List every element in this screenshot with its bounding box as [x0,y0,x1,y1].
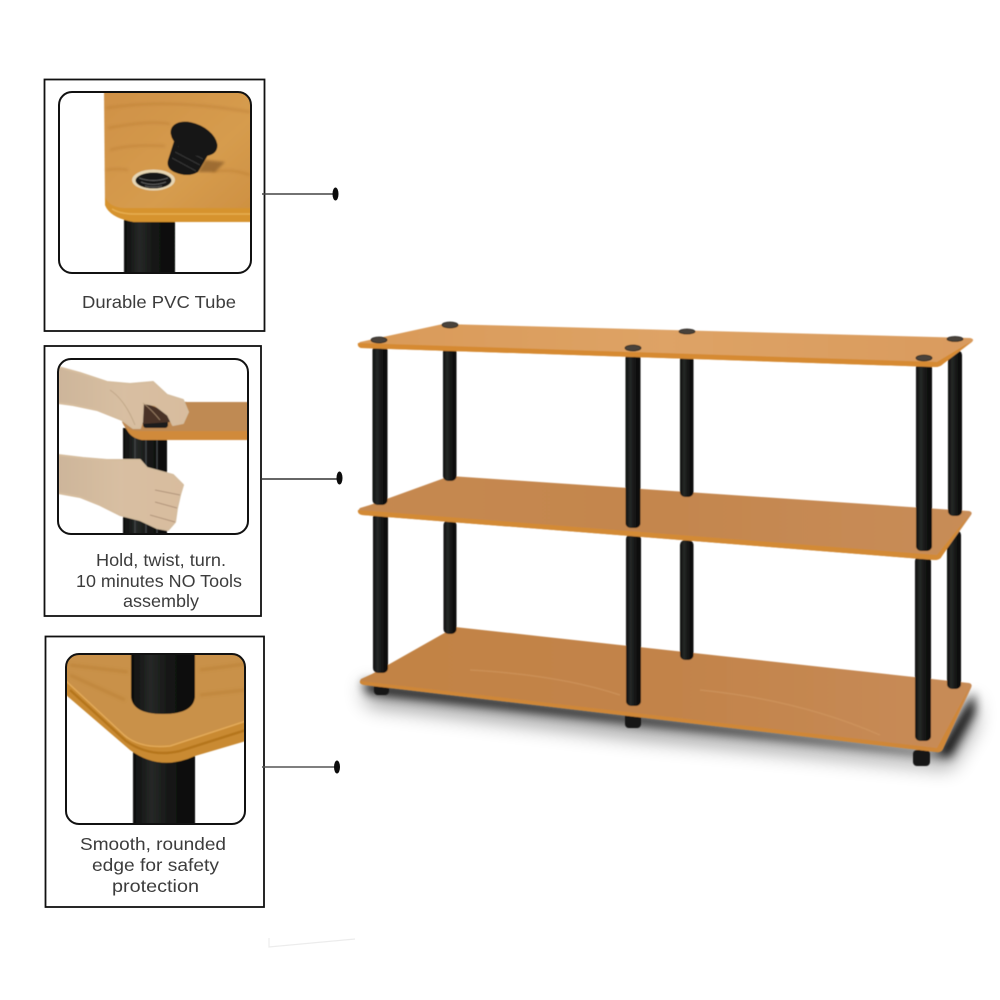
bottom shelf [360,627,972,752]
lower posts [373,512,961,741]
caption: hold, twist, turn: Hold, twist, turn. [96,550,226,570]
caption: hold, twist, turn: 10 minutes NO Tools [76,571,242,591]
caption: smooth, rounded edge: edge for safety [92,855,219,875]
photo: tabletop corner with connector screw [59,92,252,275]
photo: rounded shelf corner [66,654,246,825]
faint stray line [269,938,355,947]
product photo: three-tier shelf [358,322,973,766]
feet [374,680,930,766]
photo: hands twisting the post [58,359,250,536]
callout line: PVC tube [262,188,338,200]
caption: smooth, rounded edge: Smooth, rounded [80,834,226,854]
caption: durable PVC tube: Durable PVC Tube [82,292,236,312]
caption: hold, twist, turn [76,550,242,611]
panel: durable PVC tube [44,80,264,331]
caption: smooth, rounded edge [80,834,226,896]
caption: hold, twist, turn: assembly [123,591,199,611]
upper posts [372,345,962,551]
middle shelf [358,476,972,560]
connector caps [371,322,963,361]
callout line: rounded edge [262,760,340,774]
callout line: assembly [261,472,342,484]
panel: no tools assembly [44,346,261,616]
caption: smooth, rounded edge: protection [112,876,199,896]
panel: rounded edge [46,636,264,907]
top shelf [358,324,973,367]
floor shadow [362,682,976,768]
